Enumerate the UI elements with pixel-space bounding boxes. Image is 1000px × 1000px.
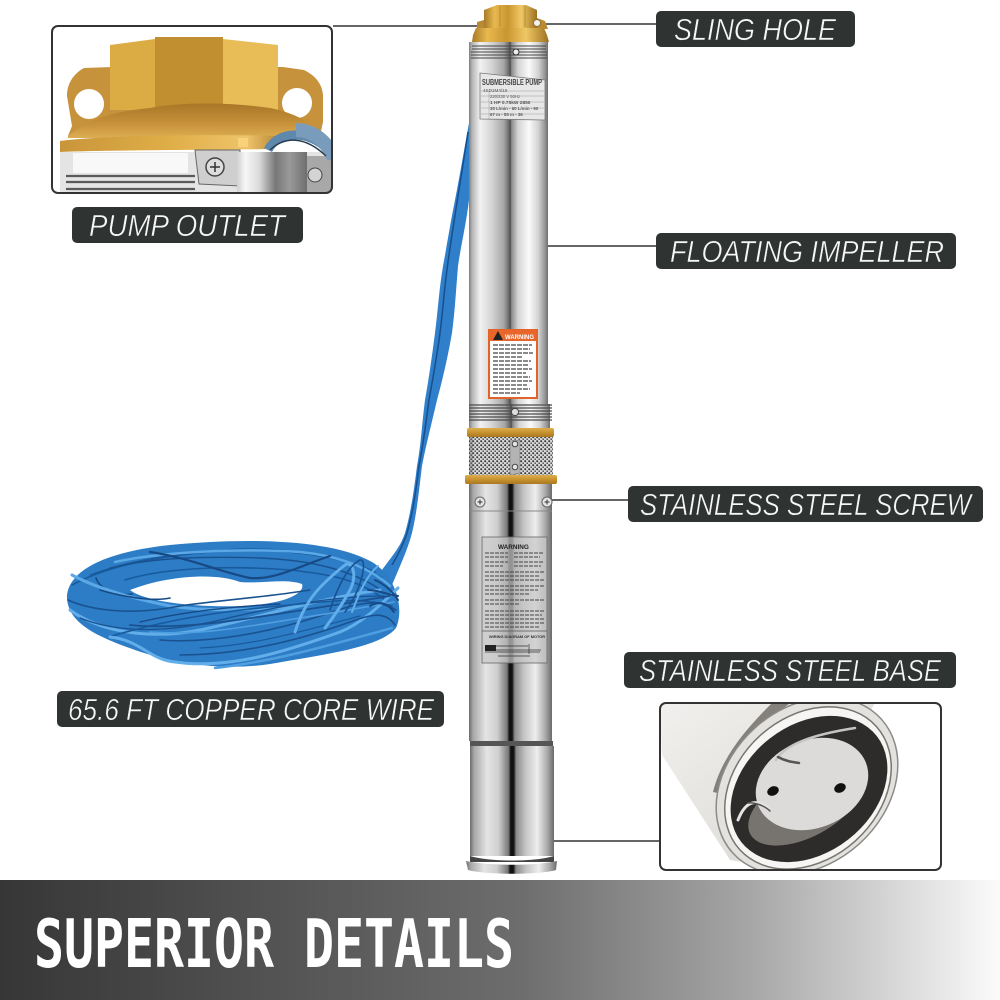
- nameplate: 67 m - 55 m - 36: [490, 112, 523, 117]
- cable running from coil to pump: [376, 123, 469, 590]
- label: pump outlet: PUMP OUTLET: [89, 208, 287, 243]
- icon: dark interior: [730, 716, 888, 862]
- icon: steel body with threads: [60, 152, 332, 193]
- icon: brass dome: [68, 104, 320, 138]
- icon: hose clamp: [195, 150, 332, 193]
- panel: stainless steel base detail: [659, 702, 942, 871]
- label: sling hole: SLING HOLE: [674, 12, 836, 47]
- connector lines: [333, 24, 659, 841]
- icon: blue cable: [268, 130, 334, 158]
- icon: wire clips: [738, 728, 855, 820]
- stainless steel base: [466, 741, 557, 874]
- nameplate: SUBMERSIBLE PUMP: [482, 78, 542, 87]
- motor warning plate: [482, 537, 547, 663]
- nameplate: 4SD1M4/16: [483, 88, 508, 93]
- icon: hex nut: [110, 37, 278, 110]
- label: copper core wire: 65.6 FT COPPER CORE WIRE: [68, 692, 434, 727]
- upper threads: [471, 46, 547, 58]
- icon: steel cylinder body: [660, 703, 875, 868]
- nameplate: [480, 73, 545, 120]
- orange warning label: WARNING: [505, 335, 534, 341]
- icon: rim: [715, 704, 899, 869]
- label: stainless steel base: STAINLESS STEEL BASE: [639, 653, 941, 688]
- motor warning plate: WARNING: [498, 544, 529, 551]
- nameplate: 1 HP 0.75kW 2850: [490, 100, 531, 106]
- icon: inner disc: [756, 738, 868, 830]
- screw on head: [513, 49, 519, 55]
- submersible pump: [465, 5, 557, 874]
- threaded band: [469, 404, 552, 428]
- banner: [0, 880, 1000, 1000]
- icon: holes: [767, 783, 846, 796]
- icon: brass ring: [60, 135, 280, 152]
- orange warning label: [489, 330, 537, 398]
- panel: pump outlet detail: [52, 26, 334, 193]
- steel screws: [475, 497, 552, 507]
- title: SUPERIOR DETAILS: [34, 905, 514, 983]
- motor warning plate: WIRING DIAGRAM OF MOTOR: [489, 634, 545, 639]
- gold ring bottom: [465, 475, 557, 484]
- perforated intake mesh: [469, 437, 553, 475]
- icon: brass pump head: [472, 5, 549, 42]
- gold ring top: [467, 428, 554, 437]
- icon: brass ears: [67, 67, 323, 136]
- wire coil: [67, 541, 399, 668]
- lower steel tube: [469, 484, 552, 741]
- upper steel tube: [469, 42, 548, 406]
- label: floating impeller: FLOATING IMPELLER: [670, 234, 944, 269]
- nameplate: 220/230 V 50Hz: [490, 94, 520, 99]
- nameplate: 30 L/min - 60 L/min - 90: [490, 106, 539, 111]
